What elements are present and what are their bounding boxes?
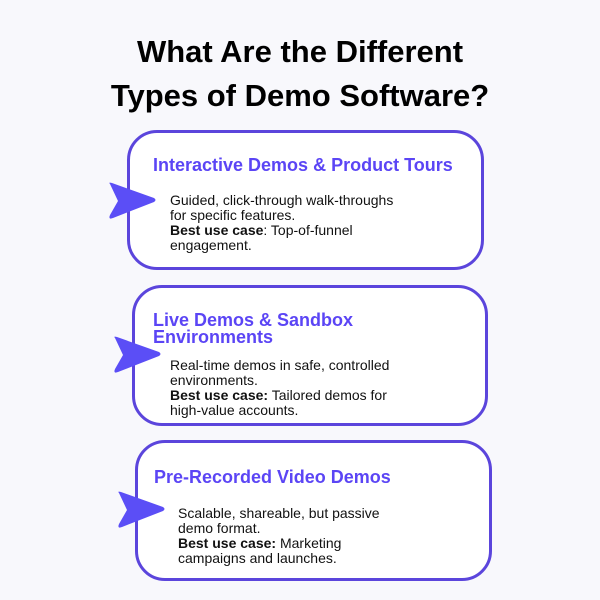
panel: interactive demos: [127, 130, 484, 270]
heading: live demos: Environments: [153, 327, 273, 347]
title: Types of Demo Software?: [111, 78, 489, 113]
heading: interactive demos: Interactive Demos & Product Tours: [153, 155, 453, 175]
text: interactive demos: Guided, click-through walk-throughs: [170, 192, 393, 208]
icon: arrow 1: [109, 182, 156, 219]
title: What Are the Different: [137, 34, 463, 69]
icon: arrow 3: [118, 492, 164, 528]
text: video demos: [178, 505, 380, 566]
text: live demos: Best use case: Tailored demos for: [170, 387, 387, 403]
text: interactive demos: [170, 192, 393, 253]
text: interactive demos: Best use case: Top-of-funnel: [170, 222, 353, 238]
text: video demos: Best use case: Marketing: [178, 535, 341, 551]
text: interactive demos: for specific features.: [170, 207, 295, 223]
title: [111, 34, 489, 113]
text: live demos: Real-time demos in safe, controlled: [170, 357, 389, 373]
heading: live demos: Live Demos & Sandbox: [153, 310, 353, 330]
text: video demos: campaigns and launches.: [178, 550, 337, 566]
text: video demos: demo format.: [178, 520, 260, 536]
panel: live demos: [132, 285, 488, 426]
text: live demos: environments.: [170, 372, 258, 388]
text: video demos: Scalable, shareable, but passive: [178, 505, 380, 521]
heading: video demos: Pre-Recorded Video Demos: [154, 467, 391, 487]
text: interactive demos: engagement.: [170, 237, 252, 253]
icon: arrow 2: [114, 336, 160, 373]
panel: pre-recorded video demos: [135, 440, 492, 581]
text: live demos: high-value accounts.: [170, 402, 298, 418]
heading: live demos: [153, 310, 353, 347]
text: live demos: [170, 357, 389, 418]
